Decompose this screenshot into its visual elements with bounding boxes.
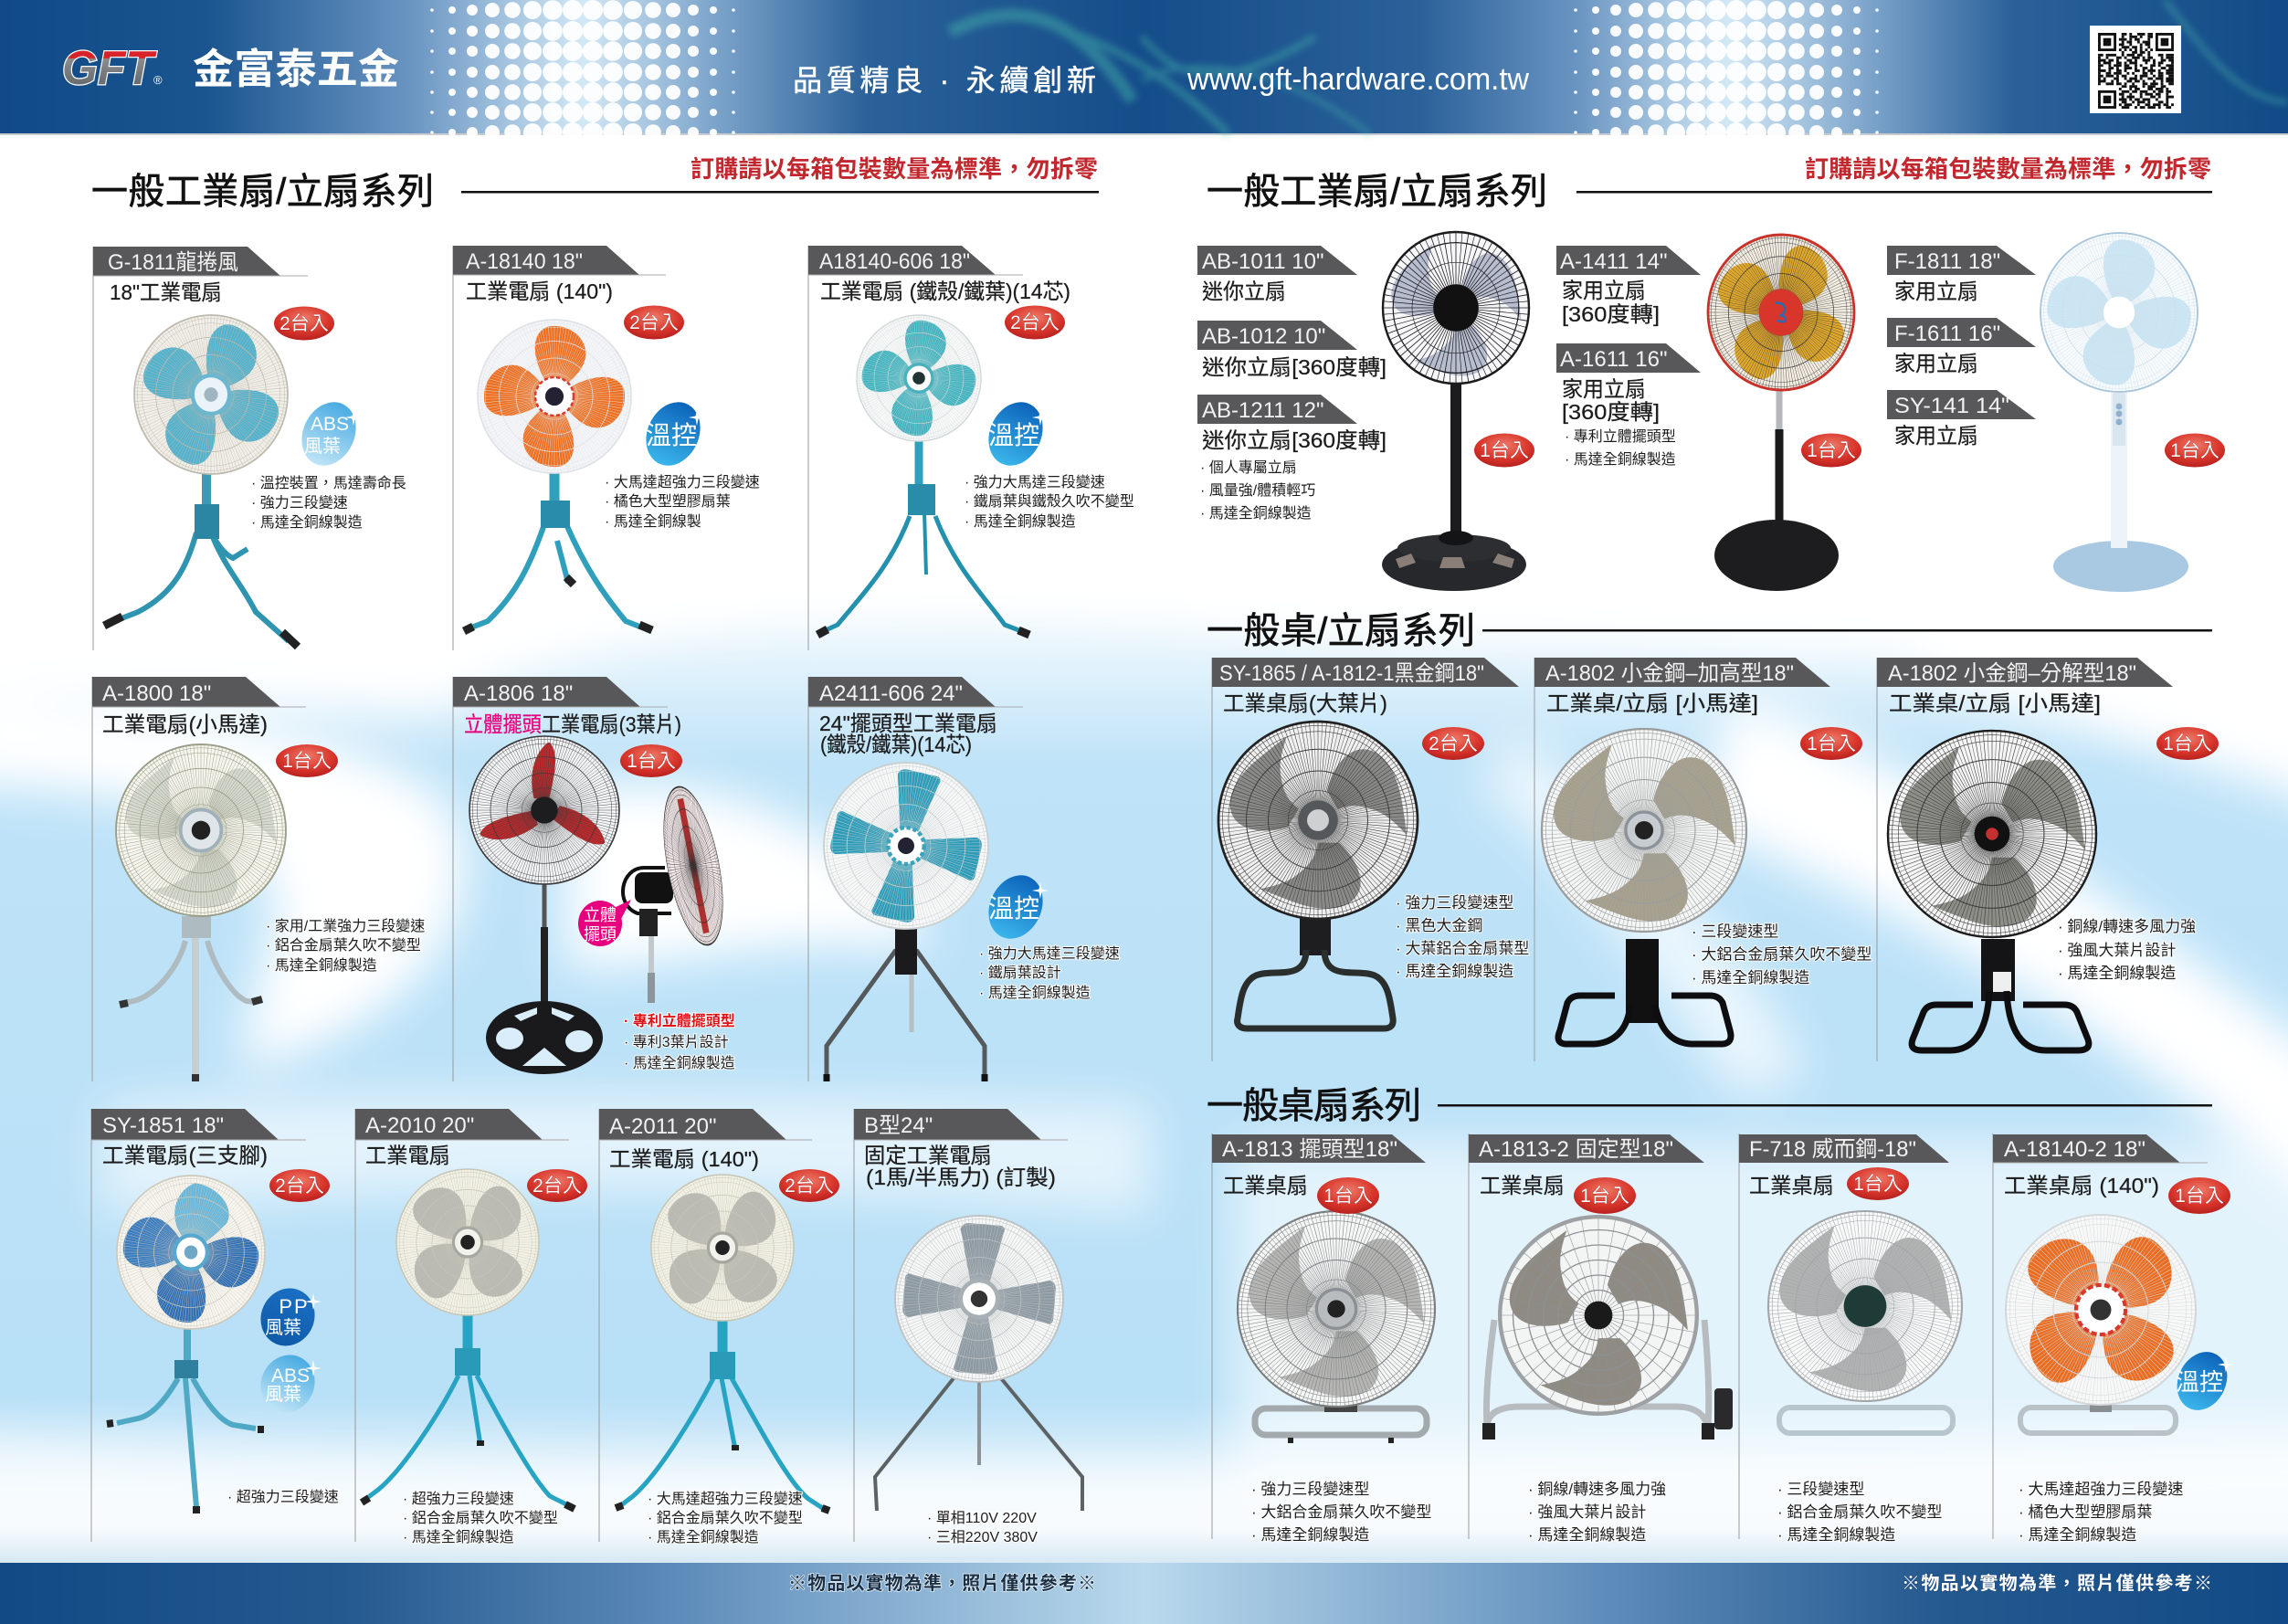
model tag: A-18140 18"	[466, 249, 583, 274]
subtitle: 家用立扇	[1894, 352, 1978, 375]
header banner	[0, 0, 2288, 142]
logo GFT: ®	[153, 73, 163, 87]
feature list: · 馬達全銅線製造	[624, 1055, 735, 1071]
badge: temperature control: 溫控	[2176, 1368, 2223, 1396]
feature list: · 馬達全銅線製造	[1200, 505, 1312, 522]
badge: temperature control	[636, 394, 711, 474]
subtitle: (鐵殼/鐵葉)(14芯)	[820, 733, 972, 756]
feature list: · 強力三段變速	[251, 495, 348, 511]
feature list: · 鋁合金扇葉久吹不變型	[403, 1510, 558, 1526]
feature list: · 強力大馬達三段變速	[965, 474, 1105, 490]
feature list	[2058, 918, 2196, 982]
badge: quantity	[276, 744, 338, 777]
badge: quantity	[1847, 1167, 1909, 1200]
feature list: · 馬達全銅線製造	[403, 1529, 514, 1545]
feature list: · 銅線/轉速多風力強	[2058, 918, 2196, 935]
subtitle: 迷你立扇[360度轉]	[1202, 428, 1387, 452]
subtitle: 工業電扇 (鐵殼/鐵葉)(14芯)	[820, 279, 1070, 303]
feature list: · 馬達全銅線製造	[1692, 969, 1809, 986]
feature list	[605, 474, 760, 530]
model tag: A-1802 小金鋼–分解型18"	[1888, 661, 2136, 686]
subtitle	[819, 712, 997, 756]
subtitle	[1562, 279, 1660, 326]
feature list: · 黑色大金鋼	[1396, 917, 1482, 934]
badge: ABS blades: ABS	[271, 1366, 310, 1387]
badge: temperature control: 溫控	[646, 421, 697, 449]
badge: 3D oscillation: 立體	[584, 906, 617, 924]
model tag AB-1211: AB-1211 12"	[1202, 398, 1324, 423]
feature list: · 強風大葉片設計	[2058, 942, 2176, 959]
badge: quantity: 1台入	[282, 751, 332, 772]
feature list: · 大鋁合金扇葉久吹不變型	[1251, 1503, 1431, 1521]
model tag: A-1800 18"	[102, 681, 211, 706]
model tag	[453, 246, 666, 275]
icon: fan	[1875, 718, 2109, 1050]
feature list	[979, 945, 1120, 1001]
feature list: · 強力三段變速型	[1251, 1481, 1369, 1498]
badge: temperature control: 溫控	[988, 421, 1039, 449]
badge: quantity: 2台入	[629, 312, 679, 333]
panel: AB mini stand fans	[1197, 226, 1535, 591]
feature list: · 馬達全銅線製造	[1251, 1526, 1369, 1544]
model tag	[93, 247, 308, 276]
badge: ABS blades: 風葉	[265, 1384, 301, 1405]
badge: quantity	[1474, 433, 1534, 468]
feature list: · 家用/工業強力三段變速	[266, 918, 425, 934]
feature list	[1692, 923, 1872, 986]
feature list	[1528, 1481, 1666, 1544]
feature list: · 馬達全銅線製造	[1528, 1526, 1646, 1544]
badge: PP blades: 風葉	[265, 1317, 301, 1338]
decorative teal swooshes	[950, 0, 2288, 134]
badge: quantity: 1台入	[1807, 440, 1856, 461]
badge: quantity: 2台入	[275, 1176, 324, 1197]
feature list: · 專利3葉片設計	[624, 1034, 729, 1050]
model tag: G-1811龍捲風	[108, 250, 238, 275]
panel: A-1813	[1212, 1134, 1447, 1544]
feature list: · 單相110V 220V	[927, 1510, 1037, 1526]
feature list	[965, 474, 1134, 530]
subtitle: 立體擺頭工業電扇(3葉片)	[464, 712, 681, 736]
feature list: · 大馬達超強力三段變速	[605, 474, 760, 490]
model tag	[808, 677, 1023, 707]
feature list: · 銅線/轉速多風力強	[1528, 1481, 1666, 1498]
feature list: · 個人專屬立扇	[1200, 459, 1297, 476]
footer note left: ※物品以實物為準，照片僅供參考※	[788, 1572, 1096, 1594]
feature list: · 鋁合金扇葉久吹不變型	[648, 1510, 803, 1526]
feature list: · 專利立體擺頭型	[1565, 428, 1676, 445]
panel: F-1811 F-1611 SY-141	[1887, 223, 2225, 592]
icon: fan	[2031, 223, 2207, 592]
icon: fan	[1482, 1215, 1733, 1439]
panel: SY-1851	[91, 1109, 339, 1542]
feature list: · 馬達全銅線製造	[1565, 451, 1676, 468]
icon: fan	[616, 1153, 829, 1511]
website: www.gft-hardware.com.tw	[1186, 62, 1529, 97]
panel: A-18140	[453, 246, 760, 650]
subtitle: 工業電扇 (140")	[466, 279, 613, 303]
badge: quantity	[269, 1169, 330, 1202]
badge: temperature control	[978, 394, 1053, 474]
feature list	[251, 475, 406, 531]
model tag F-1611	[1887, 318, 2036, 347]
feature list: · 馬達全銅線製造	[2058, 965, 2176, 982]
badge: quantity: 1台入	[1580, 1186, 1629, 1207]
feature list: · 大鋁合金扇葉久吹不變型	[1692, 946, 1872, 963]
feature list: · 風量強/體積輕巧	[1200, 482, 1315, 499]
badge: temperature control	[2167, 1344, 2237, 1418]
icon: fan	[817, 308, 1029, 635]
badge: quantity: 1台入	[2170, 440, 2219, 461]
model tag: A-1802 小金鋼–加高型18"	[1545, 661, 1794, 686]
feature list: · 大馬達超強力三段變速	[2019, 1481, 2183, 1498]
panel: A-1411 and A-1611	[1556, 216, 1872, 591]
model tag F-1811	[1887, 246, 2036, 275]
badge: 3D oscillation: 擺頭	[584, 925, 617, 944]
model tag: A18140-606 18"	[819, 249, 970, 274]
panel: SY-1865 / A-1812-1	[1207, 658, 1529, 1061]
model tag AB-1011: AB-1011 10"	[1202, 249, 1324, 274]
model tag	[453, 677, 668, 707]
subtitle: 工業電扇	[365, 1144, 450, 1167]
subtitle: 固定工業電扇	[864, 1144, 992, 1167]
model tag A-1411	[1556, 246, 1701, 275]
icon: fan	[875, 1206, 1082, 1511]
subtitle: 迷你立扇	[1202, 279, 1286, 303]
footer note right: ※物品以實物為準，照片僅供參考※	[1902, 1572, 2212, 1594]
feature list: · 強風大葉片設計	[1528, 1503, 1646, 1521]
heading: left industrial series: 一般工業扇/立扇系列	[91, 172, 434, 212]
subtitle: 工業桌/立扇 [小馬達]	[1889, 691, 2101, 715]
feature list: · 馬達全銅線製造	[251, 514, 363, 531]
model tag	[91, 1109, 306, 1140]
feature list: · 三段變速型	[1777, 1481, 1864, 1498]
feature list: · 鐵扇葉設計	[979, 965, 1061, 981]
model tag F-1611: F-1611 16"	[1894, 322, 2000, 346]
subtitle: 工業電扇(小馬達)	[102, 712, 268, 736]
badge: quantity: 2台入	[279, 313, 329, 334]
badge: quantity	[2168, 1177, 2230, 1214]
subtitle: [360度轉]	[1562, 400, 1660, 424]
panel: A-1802 tall	[1529, 658, 1872, 1061]
feature list: · 馬達全銅線製造	[648, 1529, 759, 1545]
model tag	[808, 246, 1023, 275]
feature list: · 鋁合金扇葉久吹不變型	[1777, 1503, 1942, 1521]
subtitle: 工業桌扇(大葉片)	[1223, 691, 1387, 715]
feature list	[1200, 459, 1315, 522]
subtitle: (1馬/半馬力) (訂製)	[866, 1165, 1056, 1189]
model tag AB-1012	[1197, 321, 1357, 350]
model tag AB-1012: AB-1012 10"	[1202, 324, 1325, 349]
subtitle: 家用立扇	[1894, 279, 1978, 303]
badge: quantity	[624, 305, 684, 340]
subtitle: [360度轉]	[1562, 302, 1660, 326]
badge: quantity	[779, 1169, 839, 1202]
badge: quantity	[1005, 305, 1065, 340]
badge: quantity: 1台入	[2175, 1186, 2224, 1207]
model tag AB-1211	[1197, 395, 1357, 424]
badge: ABS blades	[251, 1346, 324, 1421]
badge: temperature control	[978, 867, 1053, 947]
subtitle: 工業桌扇	[1480, 1174, 1565, 1197]
slogan: 品質精良 · 永續創新	[793, 64, 1096, 97]
badge: temperature control: 溫控	[988, 894, 1039, 923]
subtitle	[864, 1144, 1056, 1189]
badge: quantity: 1台入	[1323, 1186, 1373, 1207]
panel: A18140-606	[808, 246, 1134, 650]
model tag	[599, 1109, 812, 1140]
panel: A-1813-2	[1469, 1134, 1733, 1544]
feature list: · 強力三段變速型	[1396, 894, 1513, 912]
panel: A-2010	[355, 1109, 587, 1545]
badge: PP blades	[251, 1280, 324, 1355]
icon: fan	[464, 311, 652, 631]
badge: quantity	[2165, 433, 2225, 468]
model tag: F-718 威而鋼-18"	[1749, 1137, 1916, 1162]
order note right: 訂購請以每箱包裝數量為標準，勿拆零	[1805, 155, 2211, 183]
model tag SY-141	[1887, 390, 2036, 419]
model tag: A-1813 擺頭型18"	[1222, 1137, 1397, 1162]
badge: quantity	[1422, 727, 1484, 760]
model tag	[92, 677, 306, 707]
feature list: · 馬達全銅線製造	[1396, 963, 1513, 980]
badge: 3D oscillation	[578, 900, 631, 946]
badge: ABS blades: ABS	[311, 414, 349, 435]
feature list: · 鐵扇葉與鐵殼久吹不變型	[965, 493, 1134, 510]
subtitle	[1562, 377, 1660, 424]
feature list	[1251, 1481, 1431, 1544]
panel: F-718	[1739, 1134, 1974, 1544]
feature list: · 橘色大型塑膠扇葉	[2019, 1503, 2152, 1521]
company name: 金富泰五金	[193, 46, 399, 92]
subtitle: 18"工業電扇	[110, 280, 222, 304]
halftone dots left	[430, 0, 735, 142]
halftone dots right	[1574, 0, 1879, 142]
badge: quantity: 1台入	[2163, 733, 2212, 754]
model tag	[854, 1109, 1068, 1140]
icon: fan side view	[623, 772, 739, 1003]
badge: quantity: 2台入	[1429, 733, 1478, 754]
badge: quantity: 1台入	[1853, 1174, 1903, 1195]
subtitle: 工業桌扇	[1223, 1174, 1308, 1197]
feature list: · 大馬達超強力三段變速	[648, 1491, 803, 1507]
panel: A-1802 split	[1875, 658, 2219, 1061]
order note left: 訂購請以每箱包裝數量為標準，勿拆零	[691, 155, 1098, 183]
feature list: · 超強力三段變速	[403, 1491, 514, 1507]
panel: B-type 24	[854, 1109, 1082, 1545]
panel: A-1800	[92, 677, 425, 1081]
feature list	[403, 1491, 558, 1545]
badge: quantity: 2台入	[785, 1176, 834, 1197]
icon: fan	[362, 1147, 575, 1509]
panel: G-1811	[93, 247, 406, 650]
model tag A-1411: A-1411 14"	[1560, 249, 1668, 274]
badge: PP blades: PP	[279, 1295, 310, 1318]
subtitle: 迷你立扇[360度轉]	[1202, 355, 1387, 379]
panel: A-18140-2	[1977, 1134, 2237, 1544]
feature list	[1565, 428, 1676, 468]
subtitle: 工業桌/立扇 [小馬達]	[1546, 691, 1758, 715]
heading: right industrial series: 一般工業扇/立扇系列	[1207, 172, 1547, 212]
model tag: SY-1851 18"	[102, 1113, 224, 1138]
badge: quantity: 1台入	[1480, 440, 1529, 461]
icon: fan	[814, 753, 998, 1081]
panel: A-2011	[599, 1109, 839, 1545]
badge: quantity: 1台入	[1807, 733, 1856, 754]
icon: fan	[107, 1166, 274, 1513]
feature list: · 馬達全銅線製造	[266, 957, 377, 974]
feature list: · 溫控裝置，馬達壽命長	[251, 475, 406, 491]
badge: ABS blades: 風葉	[304, 436, 341, 457]
model tag: A-1806 18"	[464, 681, 573, 706]
heading: desk fan series: 一般桌扇系列	[1207, 1086, 1421, 1126]
badge: quantity: 2台入	[1010, 312, 1060, 333]
icon: fan	[104, 298, 304, 647]
icon: fan	[1977, 1186, 2224, 1433]
subtitle: 工業電扇 (140")	[609, 1147, 759, 1171]
model tag: A2411-606 24"	[819, 681, 963, 706]
feature list	[1777, 1481, 1942, 1544]
feature list: · 鋁合金扇葉久吹不變型	[266, 937, 421, 954]
model tag	[1993, 1134, 2208, 1163]
icon: fan front view	[460, 727, 628, 1074]
subtitle: 工業電扇(三支腳)	[102, 1144, 268, 1167]
feature list: · 超強力三段變速	[227, 1489, 339, 1505]
footer banner	[0, 1563, 2288, 1624]
icon: fan	[1207, 710, 1429, 1028]
model tag: SY-1865 / A-1812-1黑金鋼18"	[1219, 661, 1484, 686]
badge: ABS blades	[291, 394, 366, 474]
model tag: B型24"	[864, 1113, 933, 1138]
feature list: · 馬達全銅線製造	[965, 513, 1076, 530]
feature list	[1396, 894, 1529, 980]
panel: A2411-606	[808, 677, 1120, 1081]
logo GFT: GFT	[62, 42, 157, 95]
model tag: A-2010 20"	[365, 1113, 474, 1138]
icon: fan	[106, 734, 296, 1081]
model tag SY-141: SY-141 14"	[1894, 394, 2009, 418]
subtitle: 家用立扇	[1894, 424, 1978, 448]
heading: desk and stand series: 一般桌/立扇系列	[1207, 611, 1475, 651]
icon: fan	[1529, 716, 1759, 1044]
badge: quantity	[1800, 727, 1862, 760]
badge: quantity	[274, 307, 334, 340]
feature list: · 三段變速型	[1692, 923, 1778, 941]
badge: quantity: 2台入	[532, 1176, 582, 1197]
feature list: · 強力大馬達三段變速	[979, 945, 1120, 962]
subtitle: 工業桌扇	[1749, 1174, 1834, 1197]
model tag F-1811: F-1811 18"	[1894, 249, 2000, 274]
model tag A-1611	[1556, 343, 1701, 373]
model tag: A-2011 20"	[609, 1114, 716, 1139]
badge: quantity	[2156, 727, 2219, 760]
badge: quantity	[527, 1169, 587, 1202]
feature list	[648, 1491, 803, 1545]
icon: fan	[1756, 1199, 1974, 1433]
feature list: · 三相220V 380V	[927, 1529, 1038, 1545]
model tag AB-1011	[1197, 246, 1357, 275]
badge: quantity	[1317, 1177, 1379, 1214]
feature list: · 馬達全銅線製造	[1777, 1526, 1895, 1544]
subtitle: 24"擺頭型工業電扇	[819, 712, 997, 735]
badge: quantity	[1801, 433, 1861, 468]
subtitle: 工業桌扇 (140")	[2004, 1174, 2159, 1197]
feature list: · 馬達全銅線製造	[979, 985, 1091, 1001]
model tag: A-1813-2 固定型18"	[1479, 1137, 1673, 1162]
badge: quantity: 1台入	[627, 751, 676, 772]
icon: fan	[1376, 226, 1535, 591]
feature list	[624, 1012, 735, 1071]
icon: fan	[1690, 216, 1872, 591]
feature list: · 專利立體擺頭型	[624, 1012, 735, 1029]
model tag: A-18140-2 18"	[2004, 1137, 2146, 1162]
panel: A-1806	[453, 677, 739, 1081]
model tag	[1739, 1134, 1949, 1163]
QR code	[2090, 26, 2181, 113]
feature list: · 馬達全銅線製造	[2019, 1526, 2136, 1544]
subtitle: 家用立扇	[1562, 279, 1646, 302]
feature list: · 橘色大型塑膠扇葉	[605, 493, 731, 510]
badge: quantity	[1574, 1177, 1636, 1214]
model tag	[355, 1109, 569, 1140]
badge: quantity	[620, 744, 682, 777]
feature list: · 馬達全銅線製	[605, 513, 701, 530]
model tag A-1611: A-1611 16"	[1560, 347, 1668, 372]
feature list	[266, 918, 425, 974]
feature list: · 大葉鋁合金扇葉型	[1396, 940, 1529, 957]
feature list	[927, 1510, 1038, 1545]
icon: fan	[1226, 1199, 1447, 1443]
feature list	[2019, 1481, 2183, 1544]
subtitle: 家用立扇	[1562, 377, 1646, 401]
